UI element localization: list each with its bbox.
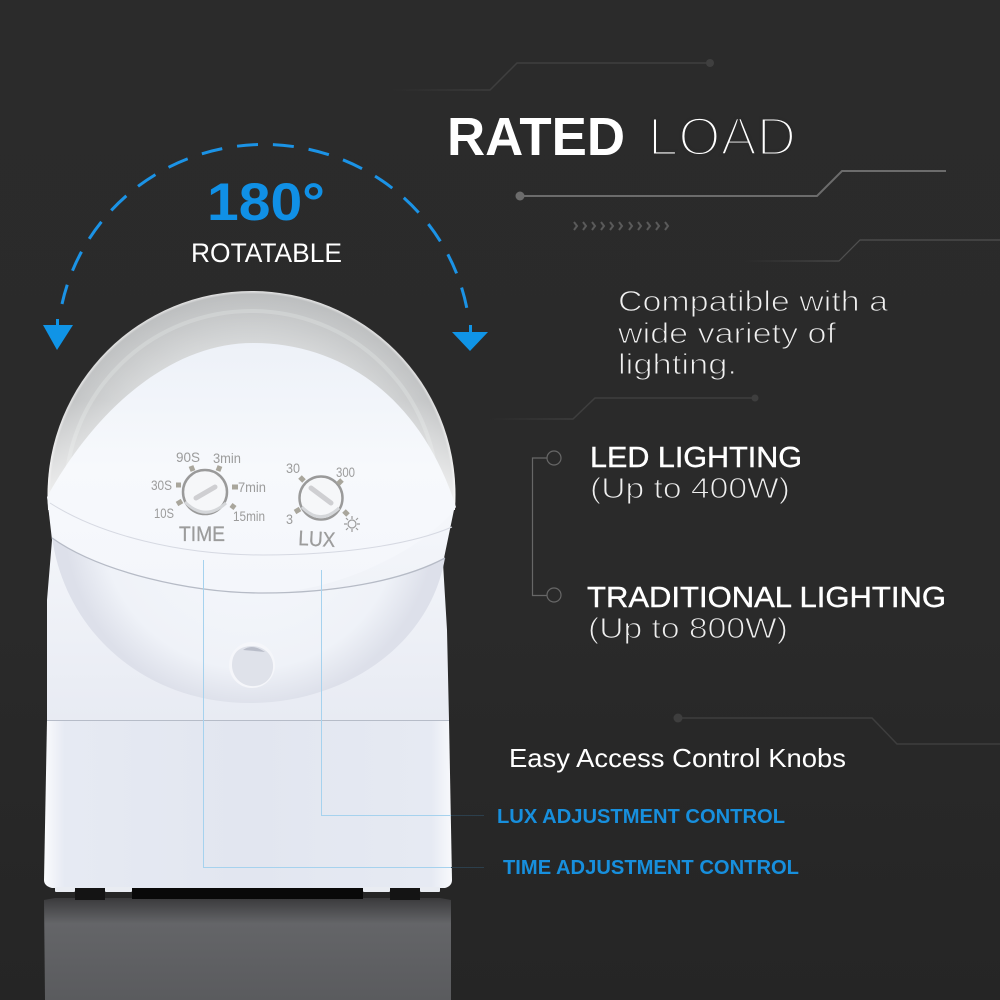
decorative circuit line: middle bbox=[490, 394, 758, 419]
dome white face bbox=[47, 343, 456, 593]
callout line: time adjustment bbox=[204, 560, 484, 868]
time labels: 90S bbox=[176, 449, 200, 465]
lux labels bbox=[286, 460, 355, 552]
rotatable label: ROTATABLE bbox=[191, 238, 342, 268]
LED lighting text: (Up to 400W) bbox=[590, 473, 790, 505]
time dial bbox=[151, 449, 266, 546]
time labels: 15min bbox=[233, 508, 265, 524]
base feet bbox=[55, 887, 440, 892]
title underline circuit bbox=[516, 171, 946, 200]
callout line: lux adjustment bbox=[322, 570, 484, 816]
lux ticks bbox=[295, 477, 348, 515]
decorative circuit line: top bbox=[390, 59, 714, 90]
rotation value: 180° bbox=[207, 173, 325, 232]
right arrow head bbox=[452, 325, 488, 351]
title: RATED bbox=[447, 107, 625, 167]
reflection of sensor bbox=[44, 898, 451, 1000]
traditional lighting text bbox=[587, 582, 946, 645]
left arrow head bbox=[43, 319, 73, 350]
description text bbox=[617, 286, 889, 381]
traditional lighting text: TRADITIONAL LIGHTING bbox=[587, 582, 946, 614]
chevron row bbox=[574, 222, 668, 230]
lux labels: LUX bbox=[298, 527, 336, 552]
knobs heading: Easy Access Control Knobs bbox=[509, 743, 846, 773]
time labels: 7min bbox=[238, 479, 266, 495]
decorative circuit line: upper right bbox=[745, 240, 1000, 261]
description text: wide variety of bbox=[617, 318, 837, 350]
time adjustment label: TIME ADJUSTMENT CONTROL bbox=[503, 857, 799, 879]
lux dial bbox=[286, 460, 360, 552]
back plate bbox=[47, 505, 455, 720]
rotation arc bbox=[62, 144, 467, 309]
icon: sun bbox=[344, 516, 360, 532]
LED lighting text: LED LIGHTING bbox=[590, 442, 802, 474]
description text: Compatible with a bbox=[618, 286, 889, 318]
time ticks bbox=[176, 466, 238, 508]
traditional lighting text: (Up to 800W) bbox=[588, 613, 788, 645]
title bbox=[447, 107, 796, 167]
title: LOAD bbox=[648, 107, 796, 167]
time labels: 30S bbox=[151, 477, 172, 493]
sensor device bbox=[44, 290, 457, 892]
description text: lighting. bbox=[618, 349, 737, 381]
time labels bbox=[151, 449, 266, 546]
time labels: TIME bbox=[179, 523, 225, 546]
lux labels: 3 bbox=[286, 511, 293, 527]
seam lines bbox=[50, 503, 452, 593]
lux knob bbox=[300, 476, 342, 520]
bracket connector with circles bbox=[532, 451, 561, 602]
lower sphere bbox=[52, 537, 445, 703]
time labels: 3min bbox=[213, 450, 241, 466]
time knob bbox=[183, 470, 227, 514]
lux labels: 300 bbox=[336, 464, 355, 480]
decorative circuit line: bottom bbox=[674, 714, 1000, 744]
shadow under sensor base bbox=[75, 886, 420, 900]
sensor hole bbox=[229, 642, 275, 688]
base block bbox=[44, 720, 452, 888]
LED lighting text bbox=[590, 442, 802, 505]
dome lens band bbox=[48, 291, 456, 510]
time labels: 10S bbox=[154, 505, 174, 521]
lux labels: 30 bbox=[286, 460, 300, 476]
lux adjustment label: LUX ADJUSTMENT CONTROL bbox=[497, 806, 785, 828]
